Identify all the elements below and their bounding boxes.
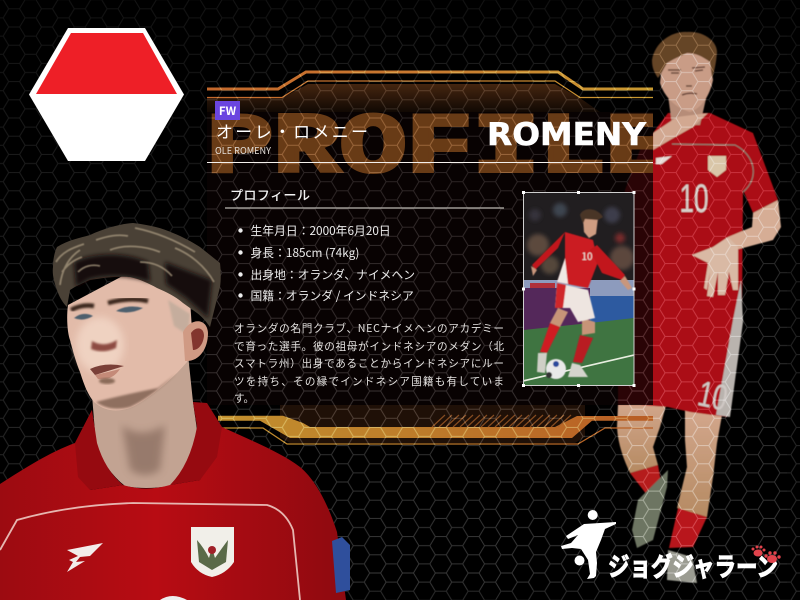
eye right: [116, 307, 143, 312]
jersey and shorts: [618, 113, 778, 417]
sleeve patch: [332, 537, 350, 593]
name latin: OLE ROMENY: [215, 143, 272, 157]
jersey number: 10: [680, 177, 708, 221]
hexagon highlight on player and bands: [207, 30, 787, 590]
shorts number: 10: [694, 372, 731, 419]
watermark title: PROFILE: [207, 102, 672, 197]
logo head: [588, 510, 598, 520]
forearm: [728, 200, 781, 250]
crest: [191, 527, 234, 577]
band fill: [218, 416, 653, 438]
neck shadow: [122, 425, 165, 475]
neck: [92, 345, 197, 488]
sleeve line: [672, 144, 753, 192]
facial features: [668, 67, 705, 95]
logo ball: [574, 556, 584, 566]
flag hexagon: [29, 28, 184, 161]
hand at throat: [653, 113, 708, 150]
biography paragraph: す。: [234, 391, 254, 406]
jersey: [0, 410, 346, 600]
header rule: [207, 162, 653, 163]
name katakana: オーレ・ロメニー: [216, 118, 368, 143]
eyebrows: [71, 299, 148, 310]
player: foreground portrait: [0, 223, 350, 600]
jersey trim: [0, 503, 300, 600]
biography paragraph: スマトラ州）出身であることからインドネシアにルー: [234, 356, 504, 371]
hatching: [432, 415, 571, 427]
shirt number hint: [160, 596, 187, 600]
profile facts list: [238, 222, 415, 304]
band thin line: [215, 428, 653, 444]
brand logo: [67, 543, 103, 572]
player: standing full body: [617, 32, 781, 583]
profile facts list: 出身地：オランダ、ナイメヘン: [250, 266, 415, 283]
hair: [53, 223, 221, 327]
hand: [692, 237, 738, 297]
jaw shadow: [96, 374, 176, 409]
paw print left: [752, 546, 766, 556]
face: [660, 45, 713, 112]
hair dark core: [74, 254, 212, 318]
shorts side stripe: [716, 280, 743, 417]
chin shadow: [99, 378, 115, 384]
action photo: [522, 191, 636, 387]
header band: [207, 70, 653, 174]
left leg: [617, 398, 668, 473]
face: [67, 272, 192, 410]
section heading: プロフィール: [230, 185, 310, 204]
biography paragraph: で育った選手。彼の祖母がインドネシアのメダン（北: [234, 339, 504, 354]
heading rule: [225, 207, 504, 209]
left boot: [632, 470, 668, 548]
position badge: [215, 101, 240, 120]
profile facts list: 国籍：オランダ / インドネシア: [250, 287, 414, 304]
temple fade: [168, 300, 190, 335]
jersey logo: [656, 156, 672, 164]
right boot: [667, 550, 697, 583]
biography paragraph: ツを持ち、その縁でインドネシア国籍も有していま: [234, 374, 504, 389]
photo selection frame: [522, 191, 636, 387]
profile facts list: 生年月日：2000年6月20日: [250, 222, 391, 239]
position badge: FW: [219, 103, 237, 119]
lower lip: [95, 369, 120, 379]
profile facts list: 身長：185cm (74kg): [250, 244, 359, 261]
top circuit line thick: [207, 72, 653, 89]
hair highlights: [56, 228, 214, 285]
jersey crest: [708, 156, 726, 177]
photo shirt number: 10: [581, 248, 593, 263]
paw print right: [764, 551, 781, 563]
biography paragraph: オランダの名門クラブ、NECナイメヘンのアカデミー: [234, 321, 504, 336]
right leg: [677, 405, 722, 517]
photo ball: [546, 359, 566, 379]
collar right: [170, 402, 222, 485]
eye left: [74, 314, 93, 320]
left sock: [630, 465, 662, 495]
hair: [652, 32, 717, 78]
site logo: [561, 510, 781, 584]
face highlight: [76, 317, 124, 373]
bottom band: [215, 405, 653, 444]
upper lip: [90, 365, 124, 375]
collar left: [75, 410, 123, 490]
ear: [183, 321, 208, 361]
logo player silhouette: [561, 522, 616, 579]
flag red field: [36, 33, 177, 94]
panel backdrop: [207, 112, 653, 405]
biography paragraph: [234, 321, 504, 406]
nose: [91, 340, 117, 351]
neck: [668, 90, 708, 125]
top circuit line thin: [207, 81, 653, 98]
name large: ROMENY: [487, 117, 647, 153]
inner ear: [191, 328, 204, 350]
right sock: [669, 508, 707, 548]
